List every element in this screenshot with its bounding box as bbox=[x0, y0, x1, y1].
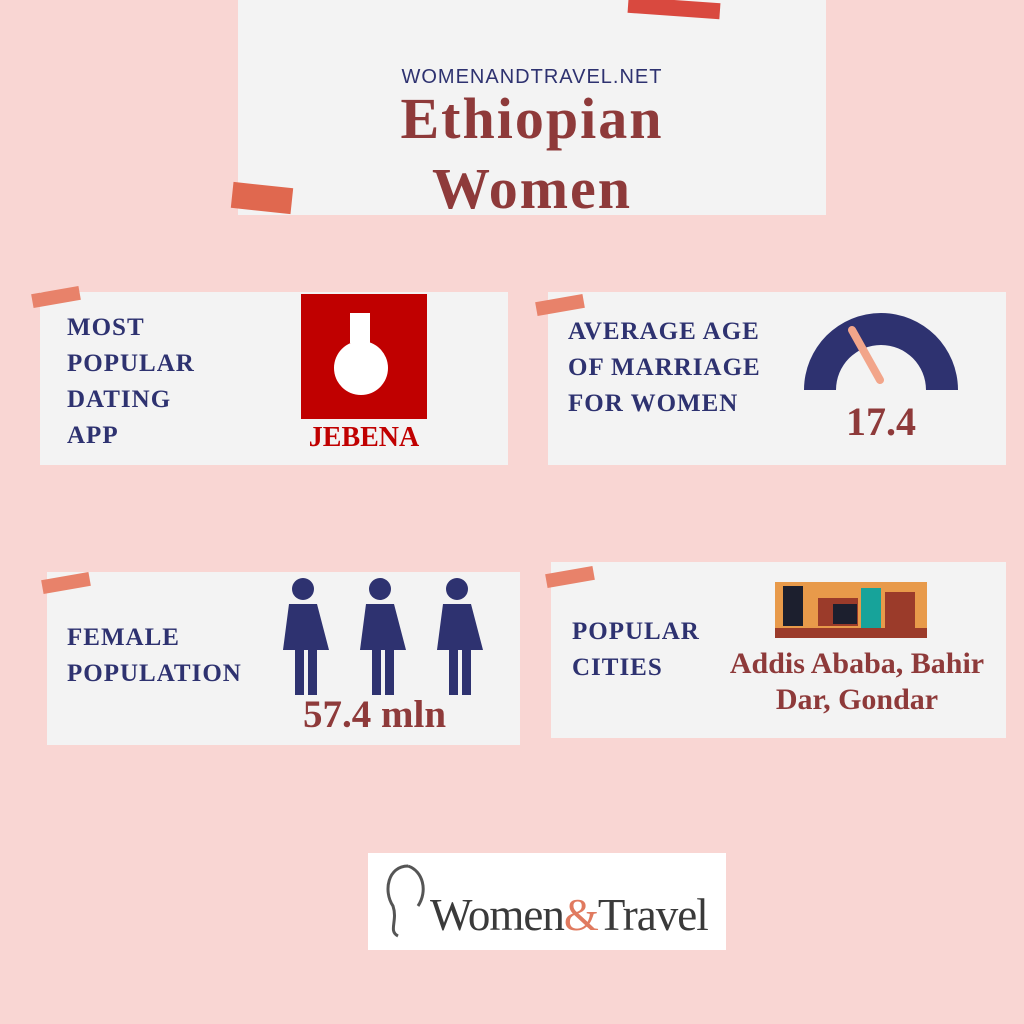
cities: Addis Ababa, Bahir bbox=[730, 647, 984, 680]
label: MOST bbox=[67, 314, 145, 341]
value: 17.4 bbox=[846, 399, 916, 444]
heading: Ethiopian bbox=[400, 86, 664, 151]
icon: women bbox=[283, 578, 483, 695]
panel: dating app bbox=[40, 292, 508, 465]
label: POPULATION bbox=[67, 660, 242, 687]
heading: Women bbox=[432, 156, 632, 221]
value: 57.4 mln bbox=[303, 693, 446, 736]
label: POPULAR bbox=[67, 350, 195, 377]
label bbox=[67, 314, 195, 449]
label: POPULAR bbox=[572, 618, 700, 645]
label: FEMALE bbox=[67, 624, 180, 651]
label: FOR WOMEN bbox=[568, 390, 738, 417]
subtitle: WOMENANDTRAVEL.NET bbox=[402, 66, 662, 88]
cities: Dar, Gondar bbox=[776, 683, 938, 716]
gauge bbox=[804, 313, 958, 390]
icon: city bbox=[775, 582, 927, 638]
label: AVERAGE AGE bbox=[568, 318, 760, 345]
label bbox=[572, 618, 700, 681]
label: OF MARRIAGE bbox=[568, 354, 761, 381]
panel: popular cities bbox=[551, 562, 1006, 738]
label: APP bbox=[67, 422, 119, 449]
logo bbox=[368, 853, 726, 950]
panel: female population bbox=[47, 572, 520, 745]
label: CITIES bbox=[572, 654, 663, 681]
app name: JEBENA bbox=[309, 422, 419, 453]
cities bbox=[730, 647, 984, 716]
label: DATING bbox=[67, 386, 171, 413]
heading bbox=[400, 86, 664, 221]
tape decoration left bbox=[231, 182, 293, 214]
logo icon bbox=[386, 864, 425, 938]
logo text: Women&Travel bbox=[430, 890, 708, 940]
panel: marriage age bbox=[548, 292, 1006, 465]
label bbox=[67, 624, 242, 687]
panel: title bbox=[238, 0, 826, 215]
tape decoration top bbox=[628, 0, 720, 19]
label bbox=[568, 318, 761, 417]
icon: jebena bbox=[301, 294, 427, 419]
